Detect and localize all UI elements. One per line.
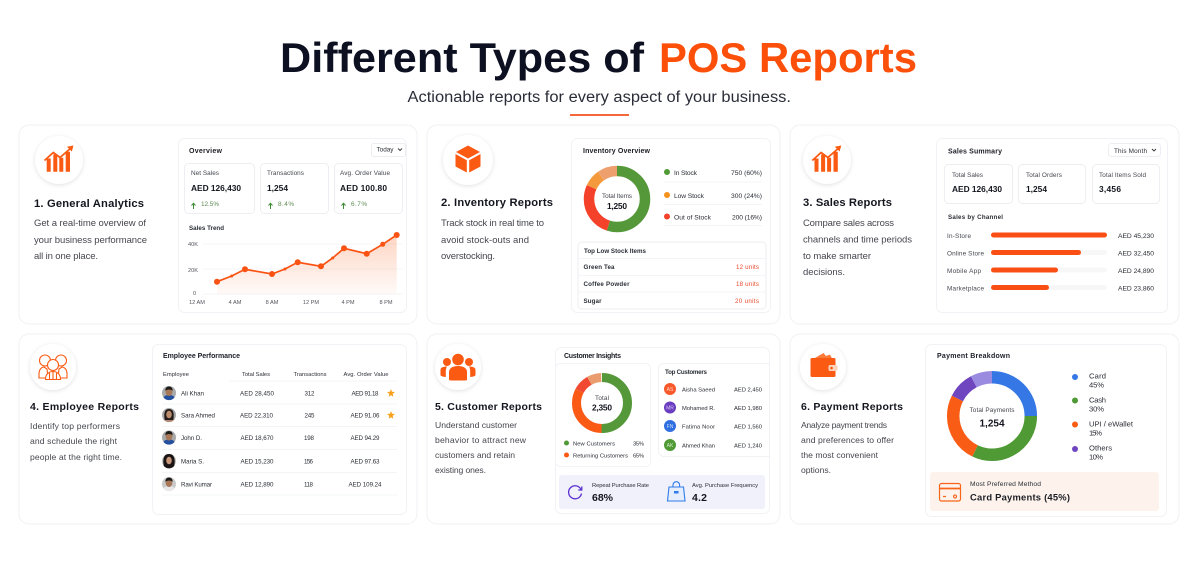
row: Maria S.: 156 — [304, 458, 314, 466]
line chart: sales trend — [188, 225, 402, 306]
panel: customer insights: Customer Insights — [564, 353, 621, 360]
stat: total orders: Total Orders — [1026, 172, 1062, 179]
legend: stock: Low Stock — [674, 193, 705, 200]
stat: total sales: AED 126,430 — [952, 184, 1002, 194]
icon: wallet — [800, 344, 846, 390]
text block: Identify top performers — [30, 421, 120, 431]
table header: Employee — [163, 372, 189, 378]
panel: sales summary: Sales Summary — [948, 148, 1002, 156]
panel: inventory overview: Inventory Overview — [583, 148, 651, 155]
bar chart: sales by channel: Marketplace — [947, 286, 984, 292]
dropdown: today — [372, 144, 406, 156]
donut chart: customers — [576, 378, 628, 428]
panel: top customers: Fatima Noor — [682, 424, 715, 430]
panel: customer insights — [556, 348, 770, 514]
stat: total orders — [1018, 164, 1086, 204]
table: top low stock items: 12 units — [736, 264, 759, 271]
bar chart: sales by channel: Online Store — [947, 250, 984, 258]
line chart: sales trend: 12 AM — [189, 300, 205, 306]
text block: Compare sales across — [803, 218, 894, 229]
row: John D.: 198 — [304, 435, 315, 442]
table header: Total Sales — [242, 372, 270, 378]
dropdown: this month: This Month — [1114, 148, 1147, 155]
line chart: sales trend: 0 — [193, 291, 196, 297]
donut chart: stock — [589, 171, 645, 227]
title: POS Reports — [659, 34, 917, 81]
line chart: sales trend: 40K — [188, 242, 198, 248]
donut chart: payments — [953, 377, 1031, 455]
stat: average order value — [334, 164, 402, 214]
panel: overview dashboard: Overview — [189, 148, 223, 155]
table: top low stock items: Green Tea — [584, 264, 615, 271]
stat: net sales: 12.5% — [201, 201, 219, 208]
icon: shopping bag — [668, 482, 685, 501]
row: Ravi Kumar: 118 — [304, 482, 314, 488]
row: Maria S. — [162, 454, 397, 472]
line chart: sales trend: 8 PM — [379, 300, 393, 306]
callout: most preferred method: Card Payments (45%) — [970, 492, 1070, 502]
icon: refresh — [569, 486, 582, 499]
stat: net sales — [184, 164, 254, 214]
row: Ali Khan: 312 — [304, 390, 315, 398]
panel: top customers: Mohamed R. — [682, 406, 715, 412]
row: Ravi Kumar: Ravi Kumar — [181, 482, 212, 488]
legend: customers — [564, 440, 644, 460]
heading: 1. General Analytics — [34, 198, 144, 210]
donut chart: customers: 2,350 — [592, 402, 612, 412]
bar chart: sales by channel: AED 32,450 — [1118, 250, 1154, 258]
text block: decisions. — [803, 267, 845, 278]
stat: transactions: 1,254 — [267, 183, 288, 193]
row: Ravi Kumar: AED 12,890 — [240, 482, 274, 488]
icon: customers — [435, 344, 481, 390]
row: Ali Khan — [162, 386, 397, 404]
legend: payments: UPI / eWallet — [1089, 420, 1134, 428]
row: Ali Khan: AED 28,450 — [240, 390, 275, 398]
panel: purchase stats: Avg. Purchase Frequency — [692, 483, 758, 489]
panel: top customers — [658, 364, 769, 456]
panel: top customers: AED 2,450 — [734, 388, 762, 394]
line chart: sales trend: 12 PM — [303, 300, 319, 306]
panel: top customers: AED 1,980 — [734, 406, 762, 412]
stat: total items sold: 3,456 — [1099, 184, 1121, 194]
donut chart: stock: 1,250 — [607, 201, 627, 211]
text block: Track stock in real time to — [441, 218, 544, 229]
panel: employee performance table: Employee Performance — [163, 353, 240, 360]
row: Sara Ahmed: Sara Ahmed — [181, 412, 216, 420]
text block — [801, 420, 894, 475]
stat: average order value: 6.7% — [351, 201, 367, 208]
text block: overstocking. — [441, 251, 495, 262]
row: Sara Ahmed: 245 — [304, 412, 315, 420]
legend: payments: 30% — [1089, 404, 1104, 414]
row: Maria S.: AED 97.63 — [350, 458, 380, 466]
text block — [441, 218, 544, 262]
row: John D. — [162, 430, 397, 450]
text block — [30, 421, 122, 462]
table: top low stock items: Top Low Stock Items — [584, 248, 647, 255]
legend: payments: Others — [1089, 444, 1112, 452]
heading: 2. Inventory Reports — [441, 197, 553, 209]
legend: stock: In Stock — [674, 170, 698, 177]
legend: customers: Returning Customers — [573, 454, 628, 460]
panel: top customers: MR — [666, 406, 674, 412]
title — [280, 34, 917, 81]
line chart: sales trend: Sales Trend — [189, 225, 224, 232]
bar chart: sales by channel: AED 24,890 — [1118, 268, 1154, 275]
panel: inventory reports card — [427, 125, 780, 324]
panel: employee reports card — [19, 334, 417, 524]
text block: and schedule the right — [30, 436, 118, 446]
text block — [435, 420, 527, 475]
table header: Transactions — [294, 372, 327, 378]
stat: total sales — [944, 164, 1012, 204]
panel: purchase stats: 4.2 — [692, 492, 707, 504]
text block: people at the right time. — [30, 452, 122, 462]
table header: Avg. Order Value — [344, 372, 388, 378]
callout: most preferred method — [930, 472, 1159, 511]
panel: general analytics card — [19, 125, 417, 324]
donut chart: stock: Total Items — [602, 193, 632, 200]
stat: transactions: Transactions — [267, 170, 304, 177]
legend: stock: Out of Stock — [674, 214, 712, 222]
panel: top customers: AED 1,240 — [734, 444, 762, 450]
text block: customers and retain — [435, 450, 515, 460]
text block: behavior to attract new — [435, 435, 527, 445]
row: Maria S.: AED 15,230 — [240, 458, 274, 466]
bar chart: sales by channel: Sales by Channel — [948, 214, 1003, 221]
row: Ali Khan: Ali Khan — [181, 390, 205, 398]
panel: top customers: Top Customers — [665, 369, 708, 376]
bar chart: sales by channel: Mobile App — [947, 268, 981, 275]
donut chart: payments: 1,254 — [980, 418, 1005, 430]
stat: transactions: 8.4% — [278, 201, 294, 208]
row: Maria S.: Maria S. — [181, 458, 204, 466]
text block: options. — [801, 465, 831, 475]
legend: payments: 45% — [1089, 380, 1104, 390]
stat: net sales: Net Sales — [191, 170, 219, 177]
legend: customers: New Customers — [573, 442, 615, 448]
icon: analytics chart — [35, 136, 83, 184]
legend: payments: Cash — [1089, 396, 1106, 404]
line chart: sales trend: 8 AM — [266, 300, 279, 306]
panel: inventory overview — [572, 138, 770, 312]
stat: total orders: 1,254 — [1026, 184, 1047, 194]
dropdown: today: Today — [376, 146, 394, 154]
table: top low stock items: 20 units — [735, 298, 759, 305]
subtitle: Actionable reports for every aspect of your business. — [408, 89, 791, 106]
heading: 4. Employee Reports — [30, 401, 139, 413]
heading: 6. Payment Reports — [801, 401, 903, 413]
bar chart: sales by channel: AED 23,860 — [1118, 286, 1154, 292]
row: Ravi Kumar — [162, 477, 397, 495]
row: John D.: AED 94.29 — [350, 435, 380, 442]
row: Sara Ahmed — [162, 408, 397, 426]
row: John D.: John D. — [181, 435, 202, 442]
bar chart: sales by channel: In-Store — [947, 233, 971, 240]
line chart: sales trend: 4 AM — [229, 300, 242, 306]
stat: total items sold — [1092, 164, 1160, 204]
panel: top customers: AED 1,560 — [734, 424, 762, 430]
row: John D.: AED 18,670 — [240, 435, 274, 442]
icon: box — [443, 135, 493, 185]
legend: stock: 300 (24%) — [731, 193, 762, 200]
legend: payments — [1072, 372, 1134, 462]
callout: most preferred method: Most Preferred Method — [970, 481, 1041, 488]
legend: payments: 15% — [1089, 428, 1102, 438]
text block: your business performance — [34, 235, 147, 246]
text block: channels and time periods — [803, 234, 912, 246]
panel: top customers: Aisha Saeed — [682, 388, 715, 394]
bar chart: sales by channel — [947, 214, 1154, 292]
text block — [34, 218, 147, 262]
panel: purchase stats: Repeat Purchase Rate — [592, 483, 649, 489]
text block: Analyze payment trends — [801, 420, 887, 430]
text block: to make smarter — [803, 251, 871, 262]
stat: transactions — [260, 164, 328, 214]
panel: top customers: AK — [667, 443, 674, 449]
legend: stock: 200 (16%) — [732, 214, 762, 222]
panel: purchase stats — [559, 475, 765, 509]
panel: payment reports card — [790, 334, 1179, 524]
panel: top customers: FN — [667, 424, 674, 430]
line chart: sales trend: 20K — [188, 268, 198, 274]
text block: Get a real-time overview of — [34, 218, 146, 229]
panel: top customers: Ahmed Khan — [682, 444, 715, 450]
stat: average order value: Avg. Order Value — [340, 170, 390, 177]
panel: payment breakdown: Payment Breakdown — [937, 353, 1010, 360]
heading: 3. Sales Reports — [803, 197, 892, 209]
line chart: sales trend: 4 PM — [341, 300, 355, 306]
dropdown: this month — [1108, 144, 1160, 156]
row: Ali Khan: AED 91.18 — [352, 390, 379, 398]
stat: total items sold: Total Items Sold — [1099, 172, 1146, 179]
panel: customer donut — [556, 364, 650, 466]
table: top low stock items: 18 units — [736, 281, 759, 288]
panel: payment breakdown — [926, 344, 1166, 516]
panel: customer reports card — [427, 334, 780, 524]
text block: avoid stock-outs and — [441, 235, 529, 246]
legend: stock — [664, 169, 762, 226]
title: Different Types of — [280, 34, 645, 81]
table: top low stock items — [578, 242, 766, 309]
panel: overview dashboard — [178, 138, 406, 312]
legend: customers: 65% — [633, 454, 644, 460]
icon: sales chart — [803, 136, 851, 184]
panel: sales reports card — [790, 125, 1179, 324]
legend: payments: Card — [1089, 372, 1106, 380]
legend: stock: 750 (60%) — [731, 170, 762, 177]
donut chart: customers: Total — [595, 395, 609, 402]
icon: card — [940, 484, 960, 501]
stat: net sales: AED 126,430 — [191, 183, 241, 193]
text block: all in one place. — [34, 251, 98, 262]
text block: and preferences to offer — [801, 435, 894, 445]
stat: average order value: AED 100.80 — [340, 183, 387, 193]
table: top low stock items: Coffee Powder — [584, 281, 630, 288]
text block — [803, 218, 912, 278]
panel: purchase stats: 68% — [592, 492, 614, 504]
row: Sara Ahmed: AED 91.06 — [350, 412, 380, 420]
text block: existing ones. — [435, 465, 486, 475]
text block: the most convenient — [801, 450, 879, 460]
panel: sales summary — [936, 138, 1168, 312]
legend: customers: 35% — [633, 442, 644, 448]
bar chart: sales by channel: AED 45,230 — [1118, 233, 1154, 240]
row: Sara Ahmed: AED 22,310 — [240, 412, 274, 420]
stat: total sales: Total Sales — [952, 172, 983, 179]
panel: top customers: AS — [667, 387, 674, 393]
panel: employee performance table — [152, 344, 406, 514]
row: Ravi Kumar: AED 109.24 — [348, 482, 382, 488]
text block: Understand customer — [435, 420, 517, 430]
legend: payments: 10% — [1089, 452, 1103, 462]
table header — [163, 372, 397, 381]
donut chart: payments: Total Payments — [970, 407, 1014, 414]
icon: employees — [30, 344, 76, 390]
heading: 5. Customer Reports — [435, 401, 542, 413]
table: top low stock items: Sugar — [584, 298, 602, 305]
